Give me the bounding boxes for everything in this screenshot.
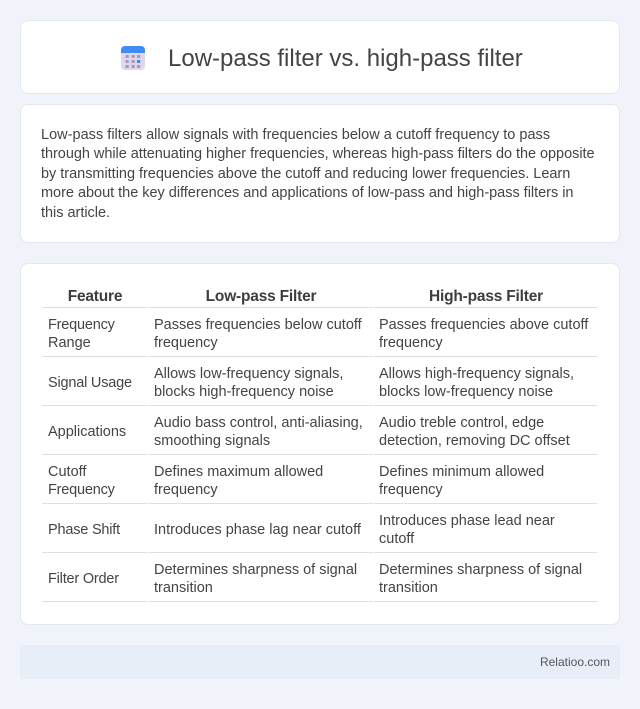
row: frequency range xyxy=(42,317,597,357)
panel: title card xyxy=(20,20,620,94)
table header: Feature xyxy=(68,288,122,305)
row: frequency range: Frequency xyxy=(48,317,115,333)
row: filter order: Determines sharpness of signal xyxy=(154,562,357,578)
text block: introduction: through while attenuating higher frequencies, whereas high-pass filters do the opposite xyxy=(41,146,595,162)
footer credit: Relatioo.com xyxy=(540,655,610,669)
row: frequency range: Passes frequencies below cutoff xyxy=(154,317,362,333)
row: applications: Audio bass control, anti-aliasing, xyxy=(154,415,363,431)
row: signal usage: Allows low-frequency signals, xyxy=(154,366,343,382)
text block: introduction: this article. xyxy=(41,205,110,221)
row: signal usage: Signal Usage xyxy=(48,375,132,391)
row: filter order xyxy=(42,562,597,602)
row: frequency range: Range xyxy=(48,335,91,351)
row: cutoff frequency: frequency xyxy=(379,482,443,498)
row: frequency range: frequency xyxy=(154,335,218,351)
text block: introduction: more about the key differences and applications of low-pass and high-pass filters in xyxy=(41,185,573,201)
row: applications xyxy=(42,415,597,455)
row: signal usage: blocks low-frequency noise xyxy=(379,384,553,400)
text block: introduction xyxy=(41,127,595,221)
row: signal usage: blocks high-frequency noise xyxy=(154,384,334,400)
row: applications: detection, removing DC offset xyxy=(379,433,570,449)
row: cutoff frequency: Defines minimum allowed xyxy=(379,464,544,480)
table header: High-pass Filter xyxy=(429,288,543,305)
row: frequency range: Passes frequencies above cutoff xyxy=(379,317,588,333)
row: filter order: transition xyxy=(379,580,438,596)
row: filter order: transition xyxy=(154,580,213,596)
panel: comparison table card xyxy=(20,263,620,625)
row: cutoff frequency: frequency xyxy=(154,482,218,498)
comparison table xyxy=(42,288,597,602)
row: cutoff frequency: Frequency xyxy=(48,482,115,498)
footer bar xyxy=(20,645,620,679)
table header xyxy=(42,288,597,308)
title: Low-pass filter vs. high-pass filter xyxy=(168,45,523,72)
row: filter order: Filter Order xyxy=(48,571,119,587)
row: cutoff frequency: Defines maximum allowed xyxy=(154,464,323,480)
row: applications: Applications xyxy=(48,424,126,440)
icon: calendar xyxy=(121,46,145,70)
panel: introduction card xyxy=(20,104,620,243)
row: applications: smoothing signals xyxy=(154,433,270,449)
row: signal usage: Allows high-frequency signals, xyxy=(379,366,574,382)
row: cutoff frequency: Cutoff xyxy=(48,464,86,480)
row: phase shift: cutoff xyxy=(379,531,414,547)
row: phase shift: Introduces phase lag near cutoff xyxy=(154,522,361,538)
row: phase shift: Introduces phase lead near xyxy=(379,513,555,529)
row: filter order: Determines sharpness of signal xyxy=(379,562,582,578)
table header: Low-pass Filter xyxy=(206,288,316,305)
row: cutoff frequency xyxy=(42,464,597,504)
row: signal usage xyxy=(42,366,597,406)
row: phase shift: Phase Shift xyxy=(48,522,120,538)
row: applications: Audio treble control, edge xyxy=(379,415,544,431)
row: frequency range: frequency xyxy=(379,335,443,351)
text block: introduction: by transmitting frequencies above the cutoff and reducing lower frequencies. Learn xyxy=(41,166,570,182)
row: phase shift xyxy=(42,513,597,553)
text block: introduction: Low-pass filters allow signals with frequencies below a cutoff frequency to pass xyxy=(41,127,550,143)
